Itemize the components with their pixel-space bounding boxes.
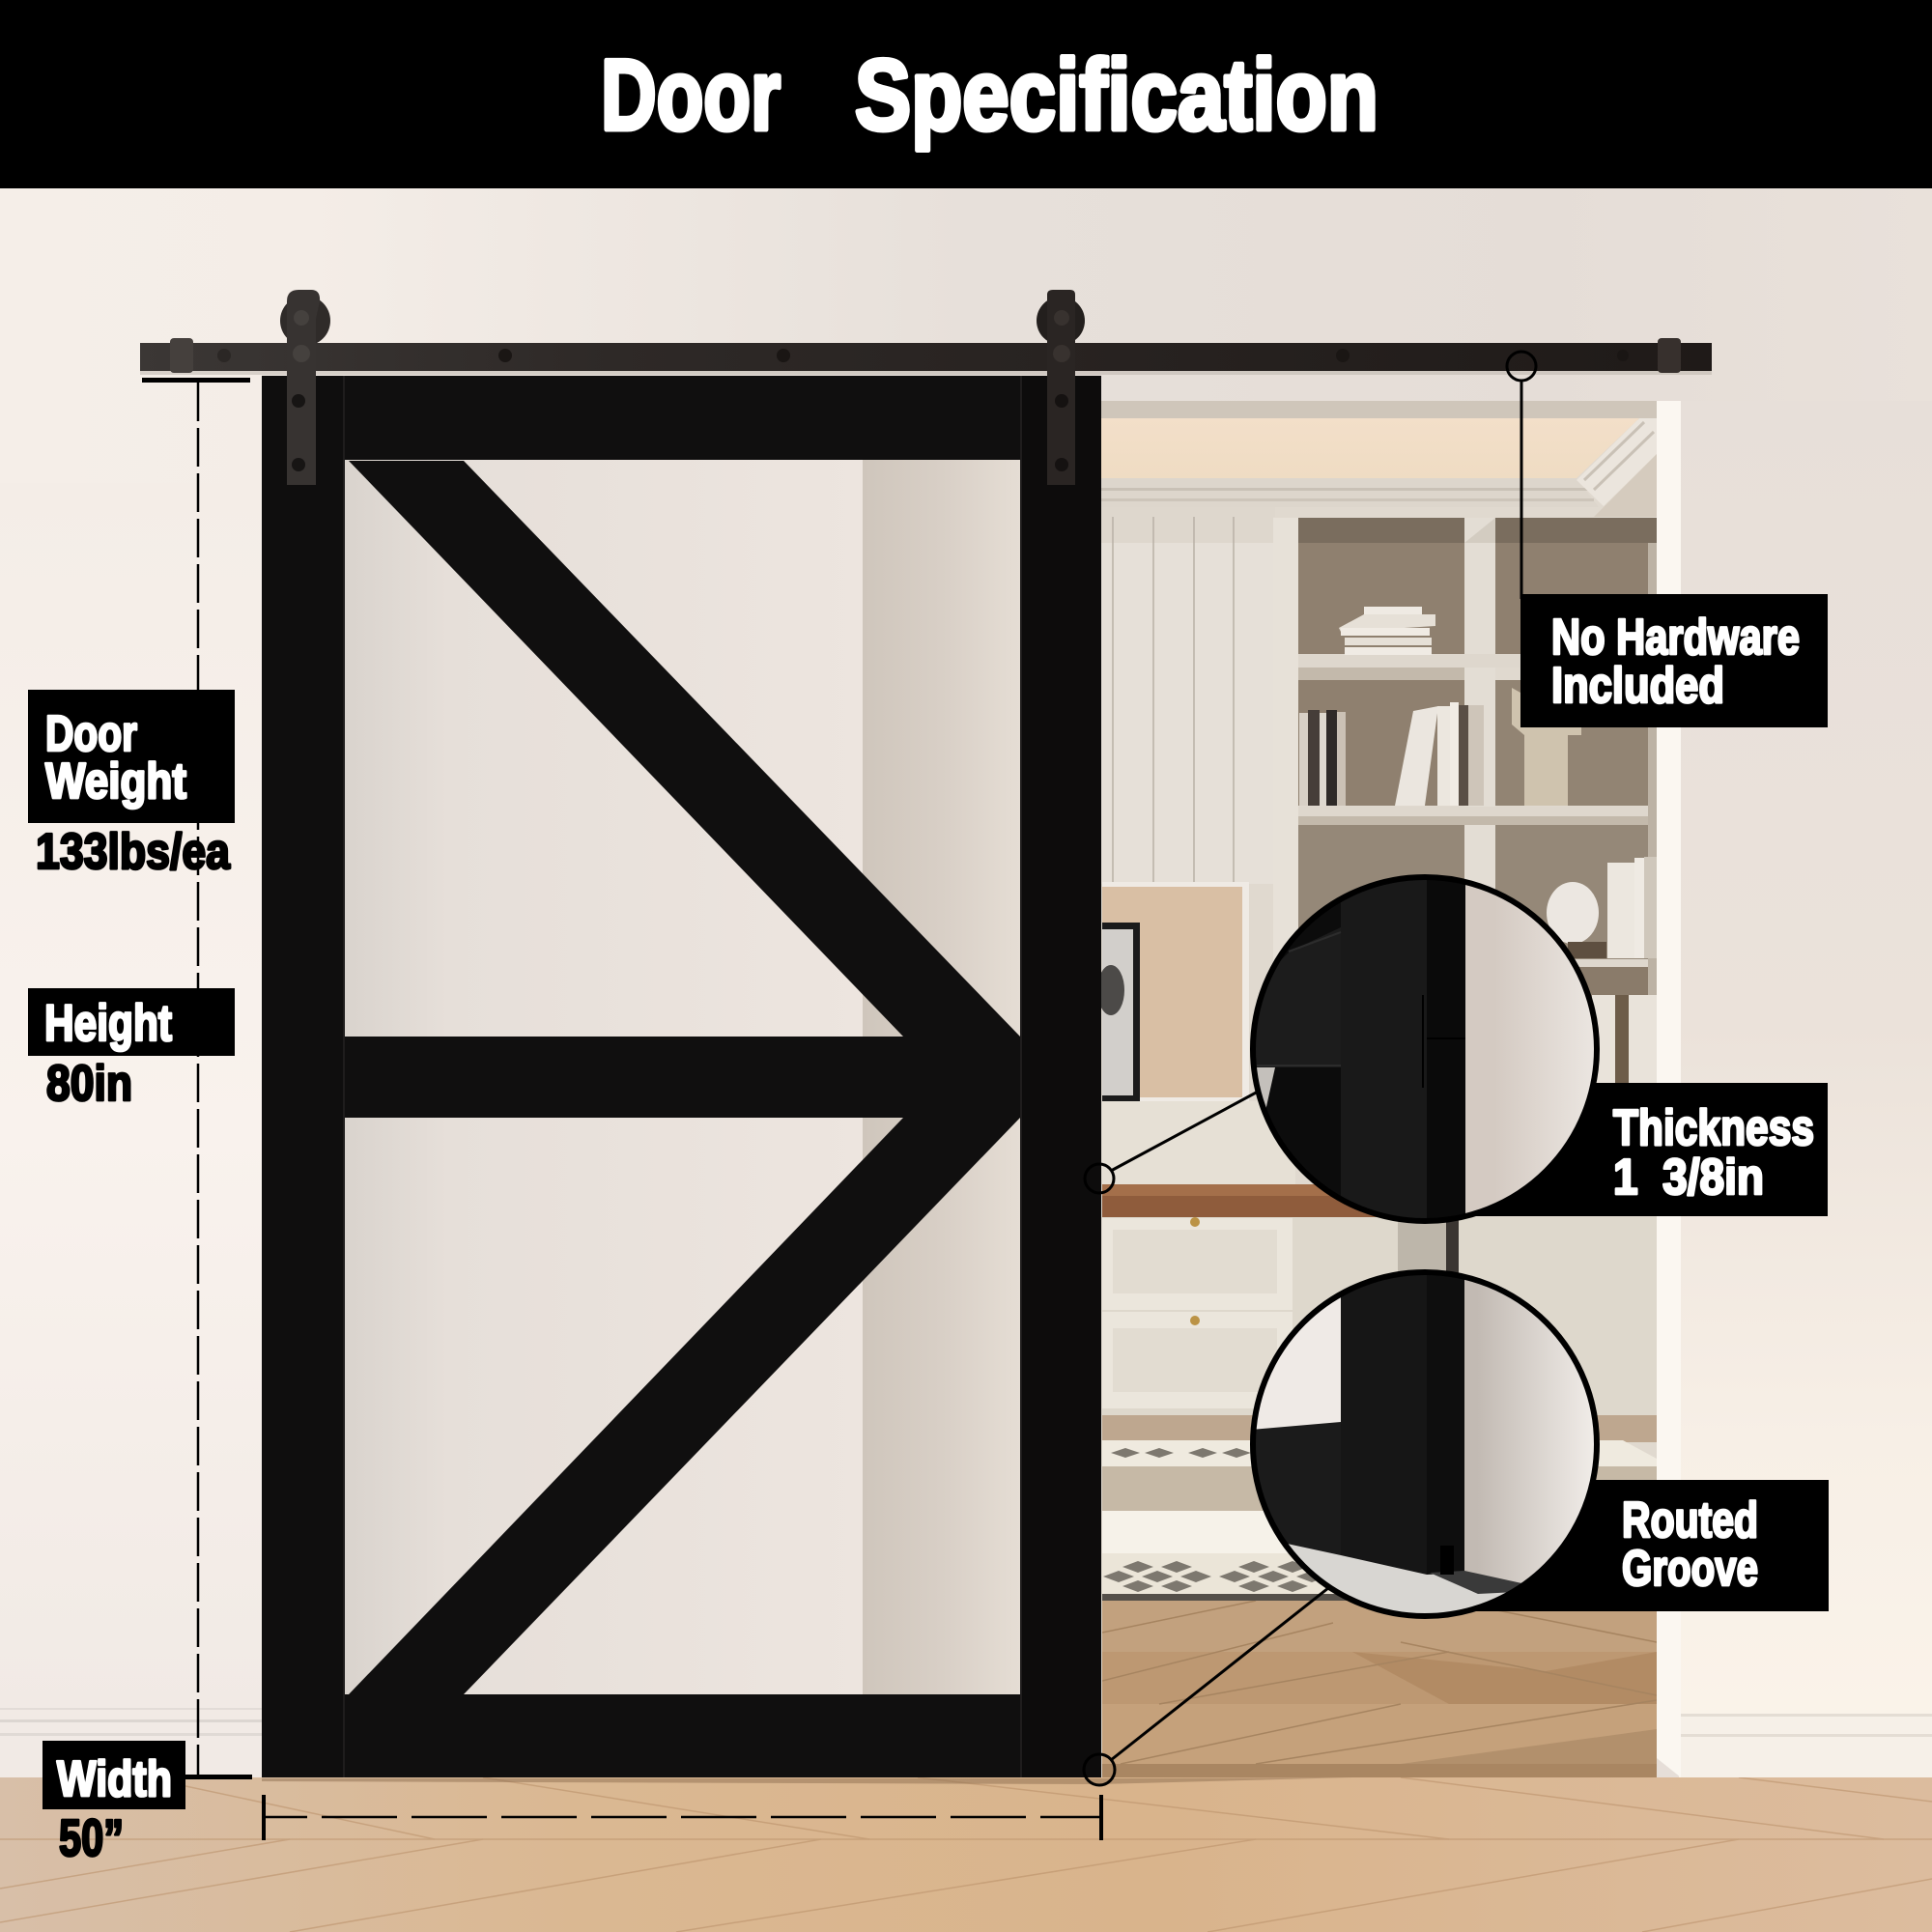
- label: door weight: Door: [45, 706, 137, 762]
- label: no hardware included: No Hardware: [1551, 610, 1800, 666]
- zoom circle: door thickness detail: [1251, 875, 1599, 1223]
- title: Specification: [855, 40, 1378, 152]
- label: door weight: Weight: [45, 753, 186, 810]
- right baseboard: [1681, 1714, 1932, 1777]
- desk cabinets and drawers: [1102, 1101, 1657, 1415]
- leaning art frames: [1097, 882, 1249, 1101]
- wainscot panelled wall: [1101, 507, 1275, 884]
- label: height: [28, 988, 235, 1112]
- height dimension line: [142, 381, 252, 1777]
- label: height: Height: [44, 995, 172, 1052]
- barn door track rail: [140, 338, 1712, 375]
- bookshelf: [1273, 517, 1657, 1104]
- rug diamond pattern: [1103, 1448, 1327, 1592]
- label: no hardware included: Included: [1551, 658, 1724, 714]
- title: Door: [601, 40, 781, 152]
- ceiling soffit: [1101, 401, 1657, 420]
- label: thickness: Thickness: [1613, 1100, 1814, 1156]
- rail end stop right: [1658, 338, 1681, 373]
- door: [262, 376, 1101, 1777]
- label: door weight: [28, 690, 235, 880]
- rail end stop left: [170, 338, 193, 373]
- label: thickness: [1430, 1083, 1828, 1216]
- label: thickness: 1 3/8in: [1613, 1150, 1764, 1206]
- label: routed groove: [1430, 1480, 1829, 1611]
- label: routed groove: Routed: [1622, 1492, 1758, 1548]
- label: width: 50”: [59, 1809, 124, 1867]
- right door hanger: [1037, 290, 1085, 485]
- books and decor on shelves: [1299, 607, 1657, 1087]
- interior herringbone floor: [1102, 1601, 1657, 1777]
- label: width: [43, 1741, 185, 1867]
- label: width: Width: [57, 1751, 172, 1807]
- door frame and cross bracing: [262, 376, 1101, 1777]
- width dimension line: [264, 1795, 1101, 1840]
- title banner: [0, 0, 1932, 188]
- interior floor and rug: [1102, 401, 1681, 1777]
- label: height: 80in: [46, 1056, 132, 1112]
- rail bolts: [217, 349, 1629, 362]
- left door hanger: [280, 290, 330, 485]
- crown moulding: [1101, 418, 1657, 517]
- callout: no hardware leader: [1507, 352, 1536, 599]
- label: no hardware included: [1520, 594, 1828, 727]
- label: routed groove: Groove: [1622, 1541, 1758, 1597]
- zoom circle: routed groove detail: [1251, 1270, 1599, 1618]
- floor: [0, 1777, 1932, 1932]
- callout: thickness leader: [1085, 1091, 1260, 1193]
- callout: groove leader: [1084, 1588, 1328, 1785]
- left baseboard: [0, 1708, 262, 1777]
- label: door weight: 133lbs/ea: [36, 824, 231, 880]
- title: [601, 40, 1378, 152]
- door glass panels: [344, 460, 1020, 1694]
- lit ceiling cove: [1101, 418, 1639, 478]
- door opening white trim: [1657, 401, 1681, 1777]
